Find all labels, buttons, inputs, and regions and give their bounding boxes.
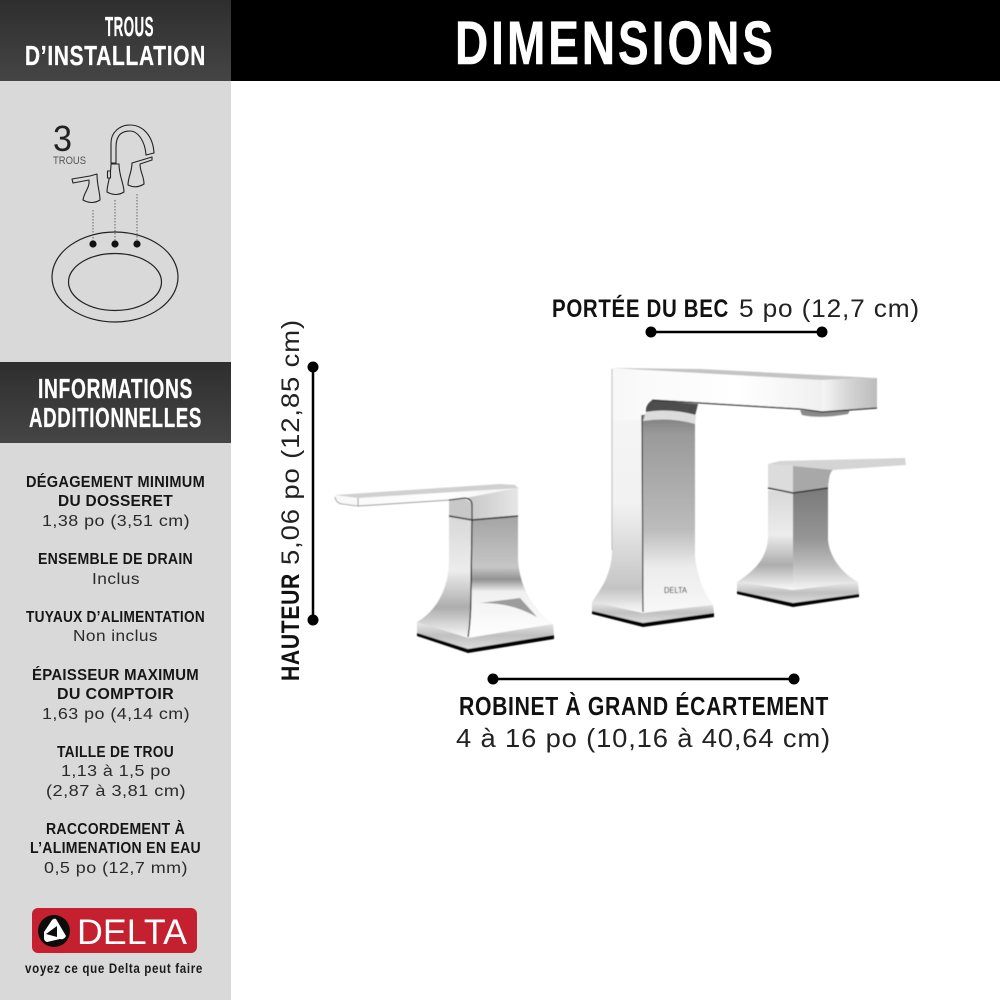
spec: drain assembly (38, 551, 193, 588)
spec: max counter thickness: ÉPAISSEUR MAXIMUM (32, 667, 199, 684)
icon: three-hole faucet and sink diagram: TROUS (53, 155, 86, 167)
heading: additional information (0, 362, 231, 443)
title banner: DIMENSIONS (455, 9, 776, 77)
spec: water connection: L’ALIMENATION EN EAU (30, 840, 201, 857)
spec: supply lines: TUYAUX D’ALIMENTATION (26, 609, 205, 626)
heading: installation holes: TROUS (105, 11, 154, 42)
dimension: spout reach: 5 po (12,7 cm) (739, 295, 920, 323)
spec: max counter thickness (32, 667, 199, 723)
dimension: height: 5,06 po (12,85 cm) (277, 319, 305, 565)
dimension: widespread faucet: ROBINET À GRAND ÉCARTEMENT (459, 691, 829, 721)
spec: hole size: 1,13 à 1,5 po (61, 763, 171, 780)
dimension: widespread faucet (456, 674, 831, 753)
dimension: spout reach: PORTÉE DU BEC (552, 294, 729, 323)
logo: Delta: DELTA (77, 913, 188, 952)
title banner (231, 0, 1000, 81)
spec: max counter thickness: DU COMPTOIR (57, 686, 174, 703)
left sidebar panel (0, 0, 231, 1000)
heading: additional information: INFORMATIONS (38, 373, 193, 404)
dimension: height: HAUTEUR (277, 573, 305, 681)
faucet: right handle (737, 458, 906, 607)
spec: hole size (46, 744, 186, 800)
spec: backsplash clearance (26, 474, 205, 530)
spec: supply lines (26, 609, 205, 645)
spec: max counter thickness: 1,63 po (4,14 cm) (42, 706, 190, 723)
spec: hole size: (2,87 à 3,81 cm) (46, 783, 186, 800)
dimension: height (277, 319, 318, 681)
spec: backsplash clearance: 1,38 po (3,51 cm) (42, 513, 190, 530)
spec: supply lines: Non inclus (73, 628, 158, 645)
faucet: left handle (335, 484, 554, 653)
faucet: center spout: DELTA (664, 586, 688, 595)
spec: water connection (30, 821, 201, 877)
heading: installation holes (0, 0, 231, 81)
spec: hole size: TAILLE DE TROU (57, 744, 174, 761)
spec: drain assembly: ENSEMBLE DE DRAIN (38, 551, 193, 568)
faucet: center spout (592, 368, 877, 627)
heading: additional information: ADDITIONNELLES (29, 402, 202, 433)
icon: three-hole faucet and sink diagram (52, 118, 178, 322)
tagline: voyez ce que Delta peut faire (25, 960, 203, 976)
dimension: spout reach (552, 294, 920, 338)
logo: Delta (32, 908, 197, 953)
dimension: widespread faucet: 4 à 16 po (10,16 à 40,64 cm) (456, 723, 831, 753)
heading: installation holes: D’INSTALLATION (25, 40, 206, 71)
spec: backsplash clearance: DÉGAGEMENT MINIMUM (26, 474, 205, 491)
spec: water connection: RACCORDEMENT À (46, 821, 185, 838)
spec: water connection: 0,5 po (12,7 mm) (44, 860, 188, 877)
spec: backsplash clearance: DU DOSSERET (58, 493, 173, 510)
icon: three-hole faucet and sink diagram: 3 (53, 118, 72, 159)
spec: drain assembly: Inclus (92, 571, 140, 588)
